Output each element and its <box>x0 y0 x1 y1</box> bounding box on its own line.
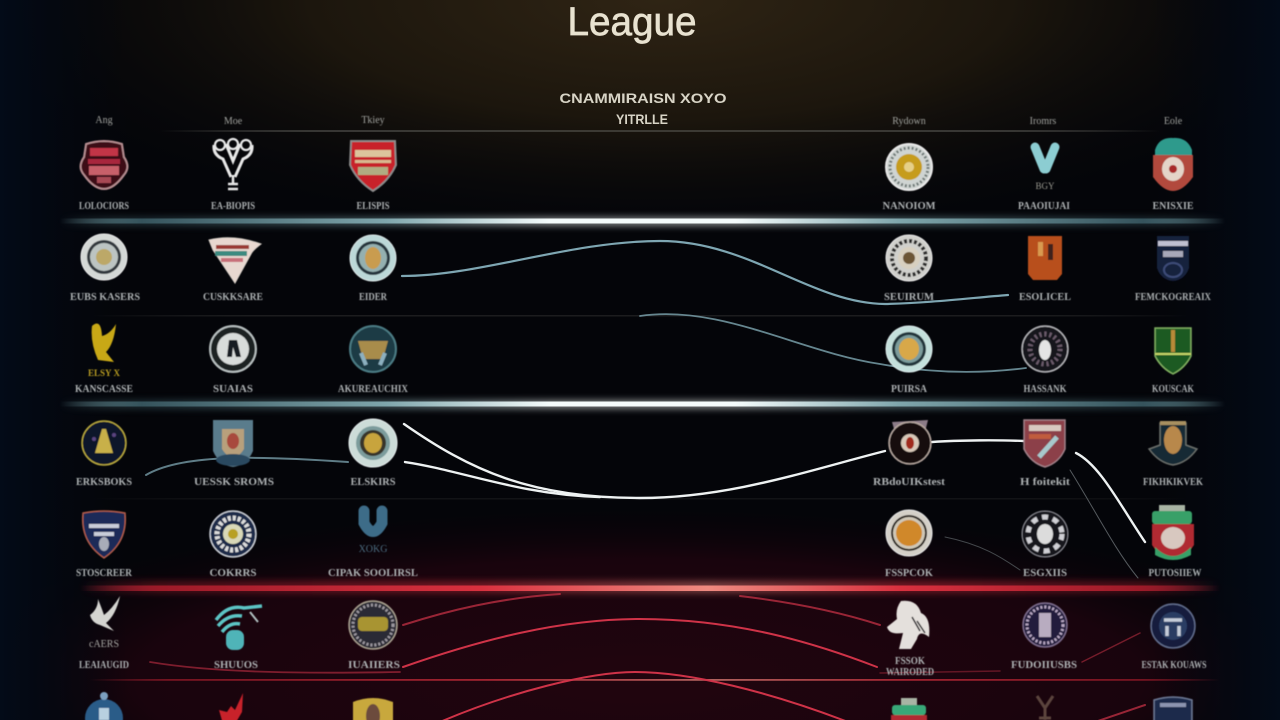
label: LEAIAUGID <box>79 660 129 671</box>
crest: navy crest <box>1157 236 1189 281</box>
label: KOUSCAK <box>1152 384 1194 395</box>
crest: navy badge <box>1154 697 1192 720</box>
column headers <box>95 115 1183 127</box>
divider bar: thin red <box>90 679 1220 681</box>
crest: white trident <box>214 139 252 189</box>
crest: white bird <box>89 596 120 650</box>
crest: black and white medallion <box>210 326 256 372</box>
title: League <box>568 0 696 44</box>
team row 5 <box>76 505 1202 579</box>
crest: dark medallion <box>1022 326 1068 372</box>
label: KANSCASSE <box>75 384 133 395</box>
crest: dark shield gold centre <box>1149 421 1197 465</box>
label: PUTOSIIEW <box>1148 568 1202 579</box>
label: ELISPIS <box>356 201 390 212</box>
crest: blue U bird <box>359 511 387 555</box>
divider bar: upper glowing <box>60 217 1225 226</box>
label: ENISXIE <box>1152 201 1194 212</box>
label: SUAIAS <box>213 384 253 395</box>
column headers: Moe <box>224 116 243 127</box>
crest: blue and tan badge <box>213 420 253 467</box>
label: NANOIOM <box>882 201 936 212</box>
divider bar: red glowing <box>80 581 1220 593</box>
crest: white bird: cAERS <box>89 639 119 650</box>
divider bar: middle glowing <box>60 400 1225 409</box>
crest: teal and red <box>1153 138 1193 191</box>
label: EUBS KASERS <box>70 292 140 303</box>
column headers: Iromrs <box>1030 116 1056 127</box>
crest: winged shield <box>209 238 261 283</box>
label: RBdoUIKstest <box>873 477 946 488</box>
crest: pale-blue gold medallion <box>886 326 932 372</box>
label: IUAIIERS <box>348 660 400 671</box>
column headers: Tkiey <box>361 115 385 126</box>
label: ERKSBOKS <box>76 477 132 488</box>
team row 3 <box>75 324 1194 395</box>
connector curves: red <box>150 594 1145 720</box>
thin row dividers <box>90 130 1190 500</box>
label: ESGXIIS <box>1023 568 1067 579</box>
crest: red badge <box>80 141 128 189</box>
label: CIPAK SOOLIRSL <box>328 568 418 579</box>
label: AKUREAUCHIX <box>338 384 409 395</box>
label: ESTAK KOUAWS <box>1142 660 1207 671</box>
crest: dark red centre <box>889 420 931 464</box>
label: EA-BIOPIS <box>211 201 255 212</box>
crest: green and red badge <box>1152 505 1194 560</box>
crest: brown centre medallion <box>886 235 932 281</box>
label: HASSANK <box>1024 384 1067 395</box>
label: STOSCREER <box>76 568 133 579</box>
crest: navy and white medallion <box>210 511 256 557</box>
crest: yellow bird <box>88 324 120 378</box>
label: SHUUOS <box>214 660 258 671</box>
label: COKRRS <box>210 568 257 579</box>
label continuation: WAIRODED <box>886 667 934 678</box>
crest: blue U bird: XOKG <box>359 544 387 555</box>
label: ESOLICEL <box>1019 292 1071 303</box>
label: PUIRSA <box>891 384 928 395</box>
team row 4 <box>76 419 1203 488</box>
crest: yellow bird: ELSY X <box>88 368 120 378</box>
crest: navy medallion <box>1151 604 1195 648</box>
crest: green shield <box>1155 328 1191 374</box>
crest: teal and gold medallion <box>350 326 396 372</box>
label: FSSPCOK <box>885 568 933 579</box>
crest: orange rectangle <box>1028 236 1062 280</box>
crest: brown stag <box>1037 696 1053 720</box>
crest: blue badge <box>85 692 123 720</box>
crest: green and red badge <box>891 698 927 720</box>
column headers: Eole <box>1164 116 1183 127</box>
connector curves: blue <box>146 241 1026 475</box>
crest: gold medallion <box>886 144 932 190</box>
crest: pale-blue gold medallion <box>350 235 396 281</box>
subtitle: CNAMMIRAISN XOYO <box>560 91 726 106</box>
crest: navy shield orange outline <box>83 511 125 558</box>
crest: black and white medallion <box>1022 511 1068 557</box>
subtitle <box>560 91 726 127</box>
label: FEMCKOGREAIX <box>1135 292 1212 303</box>
crest: red-grey shield <box>1024 420 1065 467</box>
label: UESSK SROMS <box>194 477 274 488</box>
crest: gold oblong medallion <box>349 601 397 649</box>
crest: light blue V: BGY <box>1035 181 1055 191</box>
crest: pale gold medallion <box>349 419 397 467</box>
crest: red bird <box>219 693 243 720</box>
label: FIKHKIKVEK <box>1143 477 1203 488</box>
label: FUDOIIUSBS <box>1011 660 1077 671</box>
team row 2 <box>70 234 1212 303</box>
label: FSSOK <box>895 656 925 667</box>
crest: yellow shield <box>353 698 393 720</box>
crest: light blue V <box>1035 147 1055 191</box>
crest: dark gold ring <box>82 421 126 465</box>
column headers: Rydown <box>892 116 926 127</box>
connector curves: white <box>404 424 1145 578</box>
team row 6 <box>79 596 1207 678</box>
team row 1 <box>79 138 1194 212</box>
label: EIDER <box>359 292 388 303</box>
label: CUSKKSARE <box>203 292 263 303</box>
label: SEUIRUM <box>884 292 935 303</box>
subtitle: YITRLLE <box>616 112 668 127</box>
crest: red shield <box>350 141 396 191</box>
label: LOLOCIORS <box>79 201 129 212</box>
label: H foitekit <box>1020 477 1071 488</box>
crest: orange centre medallion <box>886 510 932 556</box>
crest: teal dragon <box>216 606 262 650</box>
column headers: Ang <box>95 115 113 126</box>
label: ELSKIRS <box>350 477 396 488</box>
crest: white lion <box>887 601 929 649</box>
crest: pale medallion <box>81 234 127 280</box>
crest: purple medallion <box>1023 603 1067 647</box>
team row 7 (cropped) <box>85 692 1192 720</box>
label: PAAOIUJAI <box>1018 201 1070 212</box>
